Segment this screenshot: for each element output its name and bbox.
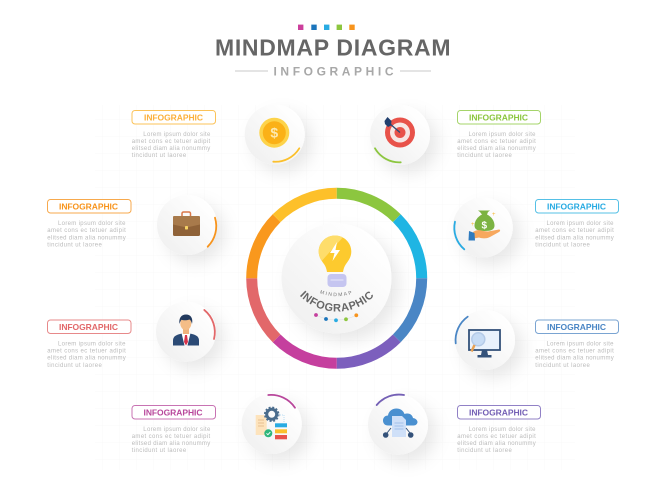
- label: [458, 110, 540, 124]
- panel: top right target: [370, 105, 540, 165]
- text block: [535, 342, 614, 369]
- arc: [273, 148, 299, 162]
- text block: elitsed diam alia nonummy: [535, 236, 614, 242]
- icon disc: [156, 302, 216, 362]
- icon: cloud document: [383, 408, 418, 438]
- text block: elitsed diam alia nonummy: [535, 356, 614, 362]
- text block: Lorem ipsum dolor site: [546, 342, 614, 348]
- arc: [456, 317, 468, 343]
- text block: Lorem ipsum dolor site: [58, 342, 126, 348]
- text block: tincidunt ut laoree: [132, 153, 187, 159]
- text block: [47, 221, 126, 248]
- text block: amet cons ec tetuer adipit: [47, 348, 126, 354]
- text block: elitsed diam alia nonummy: [47, 356, 126, 362]
- text block: Lorem ipsum dolor site: [546, 221, 614, 227]
- text block: [132, 132, 211, 159]
- text block: [457, 427, 536, 454]
- icon: money bag in hand: $: [482, 220, 488, 232]
- icon disc: [453, 198, 513, 258]
- icon: gear and documents: [256, 407, 287, 439]
- text block: amet cons ec tetuer adipit: [132, 139, 211, 145]
- text block: Lorem ipsum dolor site: [143, 132, 211, 138]
- heading: MINDMAP DIAGRAM: [215, 34, 450, 60]
- panel: lower right monitor: [455, 310, 618, 370]
- panel: bottom left process: [132, 394, 302, 454]
- panel: lower left businessman: [47, 302, 216, 369]
- label: INFOGRAPHIC: [469, 407, 528, 417]
- text block: amet cons ec tetuer adipit: [535, 228, 614, 234]
- arc: [268, 395, 295, 408]
- label: [48, 200, 131, 213]
- text block: amet cons ec tetuer adipit: [457, 434, 536, 440]
- icon: coin: [259, 118, 289, 148]
- text block: amet cons ec tetuer adipit: [457, 139, 536, 145]
- icon: money bag in hand: +: [471, 222, 475, 228]
- icon: briefcase: [173, 212, 200, 236]
- icon: target: [384, 117, 415, 148]
- curved label: MINDMAP: [320, 290, 352, 296]
- panel: bottom right cloud: [368, 395, 540, 455]
- arc: [208, 218, 216, 247]
- text block: [535, 221, 614, 248]
- icon disc: [455, 310, 515, 370]
- label: [132, 110, 216, 124]
- icon: light bulb: [319, 236, 351, 287]
- icon disc: [370, 105, 430, 165]
- label: INFOGRAPHIC: [144, 112, 203, 122]
- text block: amet cons ec tetuer adipit: [535, 348, 614, 354]
- text block: elitsed diam alia nonummy: [132, 441, 210, 447]
- arc: [204, 310, 215, 339]
- icon disc: [368, 395, 428, 455]
- label: [458, 406, 540, 419]
- colour squares: [298, 25, 355, 30]
- text block: Lorem ipsum dolor site: [468, 427, 536, 433]
- text block: tincidunt ut laoree: [535, 242, 590, 248]
- panel: middle left briefcase: [47, 195, 217, 255]
- text block: [457, 132, 536, 159]
- label: [536, 320, 618, 334]
- icon: money bag in hand: +: [492, 212, 496, 218]
- label: INFOGRAPHIC: [547, 322, 606, 332]
- icon disc: [157, 195, 217, 255]
- arc: [377, 395, 404, 405]
- icon disc: [242, 394, 302, 454]
- text block: Lorem ipsum dolor site: [143, 427, 211, 433]
- colour dots: [314, 313, 358, 322]
- text block: elitsed diam alia nonummy: [47, 236, 126, 242]
- icon disc: [245, 104, 305, 164]
- label: INFOGRAPHIC: [547, 201, 606, 211]
- text block: tincidunt ut laoree: [535, 363, 590, 369]
- label: INFOGRAPHIC: [144, 407, 202, 417]
- icon: coin: $: [270, 124, 278, 140]
- text block: tincidunt ut laoree: [132, 448, 187, 454]
- text block: elitsed diam alia nonummy: [132, 146, 210, 152]
- text block: tincidunt ut laoree: [47, 363, 102, 369]
- icon: monitor with magnifier: [469, 330, 500, 358]
- label: [48, 320, 131, 334]
- label: [536, 200, 618, 213]
- title block: [215, 25, 450, 78]
- central ring: [252, 193, 422, 363]
- central hub: [282, 236, 402, 344]
- text block: tincidunt ut laoree: [47, 242, 102, 248]
- text block: Lorem ipsum dolor site: [468, 132, 536, 138]
- text block: amet cons ec tetuer adipit: [132, 434, 211, 440]
- arc: [375, 148, 401, 162]
- text block: Lorem ipsum dolor site: [58, 221, 126, 227]
- text block: tincidunt ut laoree: [457, 448, 512, 454]
- text block: elitsed diam alia nonummy: [457, 146, 536, 152]
- label: INFOGRAPHIC: [59, 322, 118, 332]
- icon: businessman: [173, 314, 199, 346]
- panel: top left coin: [132, 104, 305, 164]
- label: [132, 406, 216, 419]
- icon: money bag in hand: [468, 210, 500, 240]
- curved label: INFOGRAPHIC: [300, 290, 373, 312]
- panel: middle right money: [453, 198, 618, 258]
- text block: [47, 342, 126, 369]
- text block: elitsed diam alia nonummy: [457, 441, 536, 447]
- text block: amet cons ec tetuer adipit: [47, 228, 126, 234]
- label: INFOGRAPHIC: [469, 112, 528, 122]
- label: INFOGRAPHIC: [59, 201, 118, 211]
- subtitle: INFOGRAPHIC: [274, 64, 394, 78]
- text block: [132, 427, 211, 454]
- text block: tincidunt ut laoree: [457, 153, 512, 159]
- arc: [454, 222, 464, 249]
